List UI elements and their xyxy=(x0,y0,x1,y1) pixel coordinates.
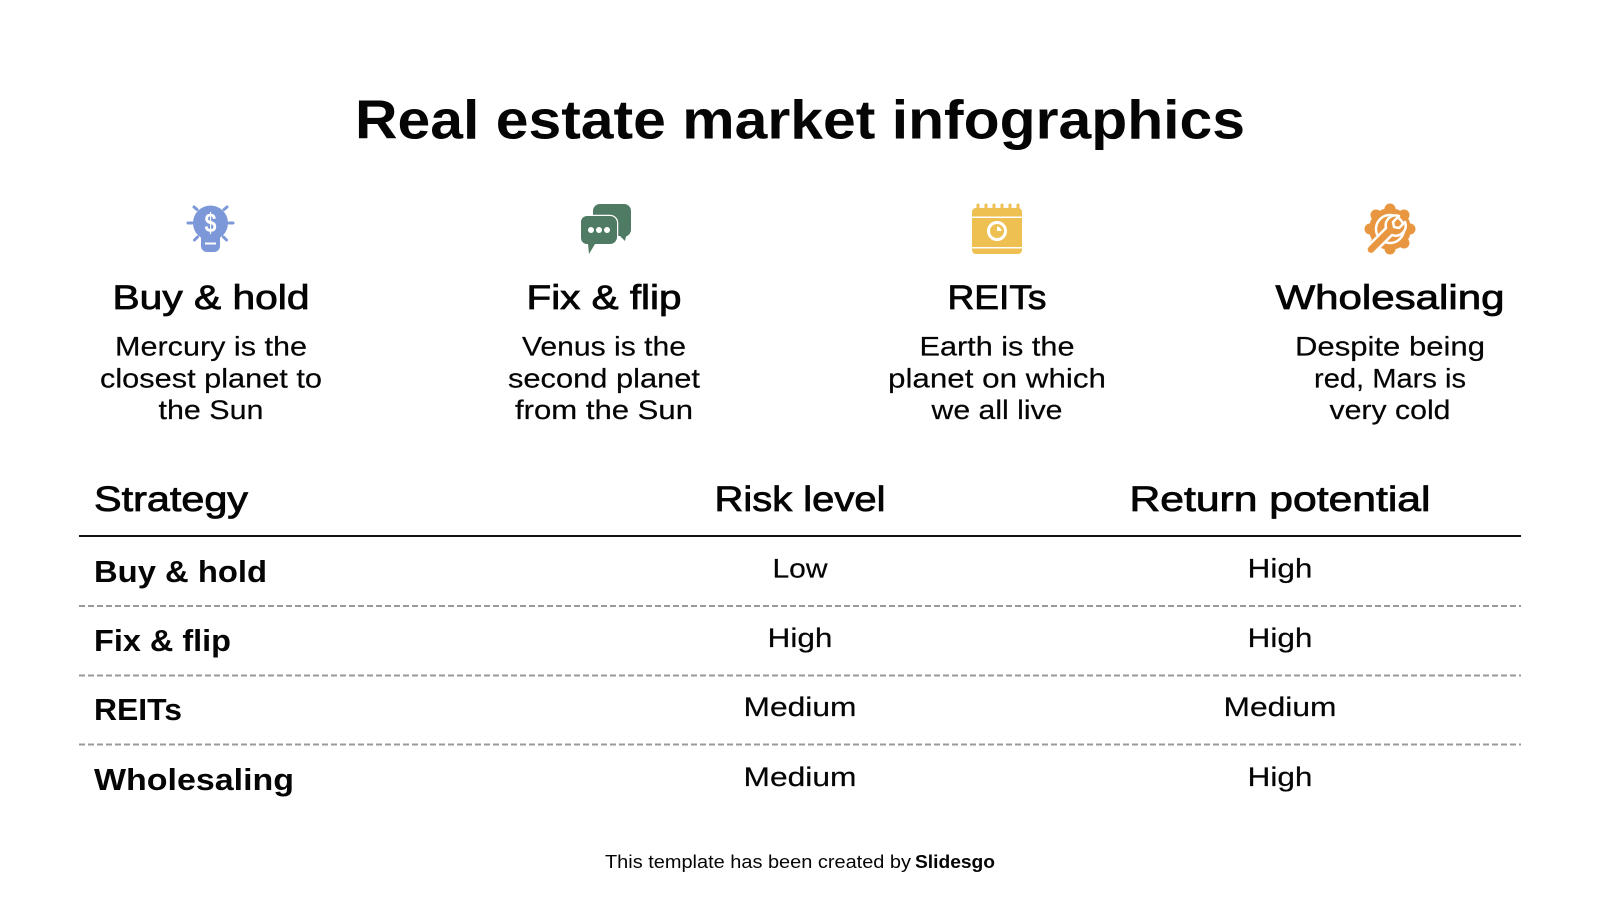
footer credit: This template has been created by xyxy=(605,852,911,872)
icon: calendar with clock xyxy=(972,205,1022,254)
text: mercury description xyxy=(100,332,322,425)
text: earth description: Earth is the xyxy=(920,332,1074,362)
row: wholesaling: Wholesaling xyxy=(94,763,294,797)
row: reits: Medium xyxy=(1224,692,1336,722)
icon: chat bubbles xyxy=(581,204,631,254)
text: venus description: second planet xyxy=(508,364,701,394)
icon: light bulb with dollar xyxy=(188,206,233,252)
row: wholesaling xyxy=(94,762,1312,797)
text: mars description: Despite being xyxy=(1295,332,1485,362)
footer credit: Slidesgo xyxy=(915,852,995,872)
heading: wholesaling: Wholesaling xyxy=(1276,279,1504,317)
text: venus description xyxy=(508,332,701,425)
heading: fix and flip: Fix & flip xyxy=(526,279,682,317)
heading: reits: REITs xyxy=(948,279,1046,317)
table header: Return potential xyxy=(1130,480,1430,519)
row: buy and hold: High xyxy=(1248,554,1312,584)
row: reits: REITs xyxy=(94,693,182,727)
row: reits xyxy=(94,692,1336,727)
row: fix and flip: Fix & flip xyxy=(94,624,231,658)
row: buy and hold: Buy & hold xyxy=(94,555,267,589)
heading: buy and hold: Buy & hold xyxy=(112,279,310,317)
panel: buy and hold xyxy=(100,206,322,425)
table header xyxy=(94,480,1430,519)
icon: light bulb with dollar: $ xyxy=(204,208,216,238)
row: wholesaling: High xyxy=(1248,762,1312,792)
row: buy and hold xyxy=(94,554,1312,589)
row: wholesaling: Medium xyxy=(744,762,856,792)
row: reits: Medium xyxy=(744,692,856,722)
text: earth description xyxy=(888,332,1106,425)
panel: wholesaling xyxy=(1276,208,1504,425)
text: earth description: planet on which xyxy=(888,364,1106,394)
text: mars description: red, Mars is xyxy=(1314,364,1466,394)
row: fix and flip xyxy=(94,623,1312,658)
text: mars description xyxy=(1295,332,1485,425)
text: mercury description: the Sun xyxy=(158,395,264,425)
table header: Risk level xyxy=(714,480,886,519)
text: venus description: Venus is the xyxy=(522,332,686,362)
table header: Strategy xyxy=(94,480,249,519)
row: fix and flip: High xyxy=(768,623,832,653)
text: earth description: we all live xyxy=(930,395,1062,425)
text: mercury description: Mercury is the xyxy=(115,332,307,362)
title: Real estate market infographics xyxy=(355,88,1245,150)
row: fix and flip: High xyxy=(1248,623,1312,653)
text: mars description: very cold xyxy=(1330,395,1450,425)
panel: reits xyxy=(888,205,1106,425)
table: strategies xyxy=(79,480,1521,797)
panel: fix and flip xyxy=(508,204,701,425)
text: venus description: from the Sun xyxy=(515,395,693,425)
icon: gear with wrench xyxy=(1366,208,1411,254)
row: buy and hold: Low xyxy=(772,554,828,584)
text: mercury description: closest planet to xyxy=(100,364,322,394)
